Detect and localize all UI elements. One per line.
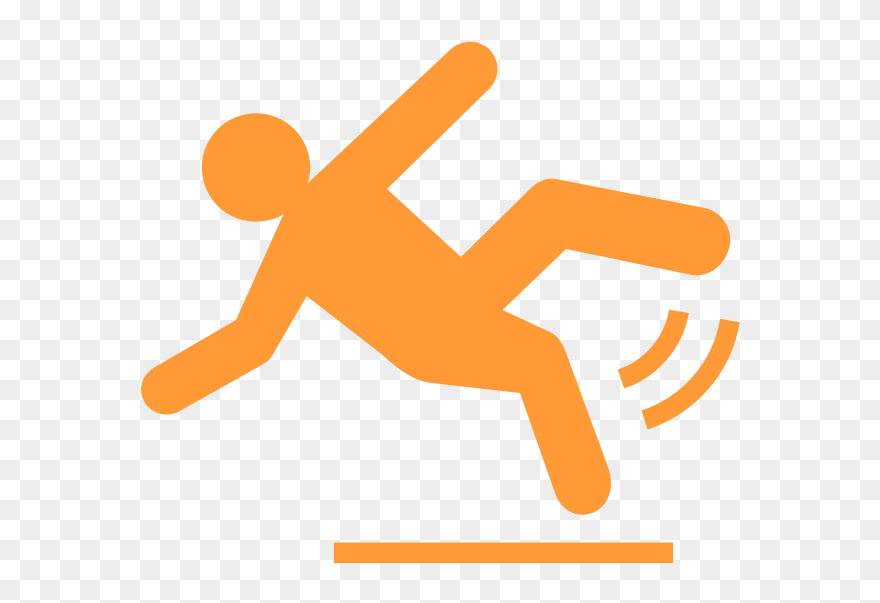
- figure head: [202, 113, 310, 222]
- icon: large impact arc: [644, 320, 730, 420]
- ground line: [334, 542, 673, 563]
- icon: falling figure: [141, 42, 730, 515]
- icon: small impact arc: [621, 311, 679, 379]
- figure body and limbs: [141, 42, 730, 515]
